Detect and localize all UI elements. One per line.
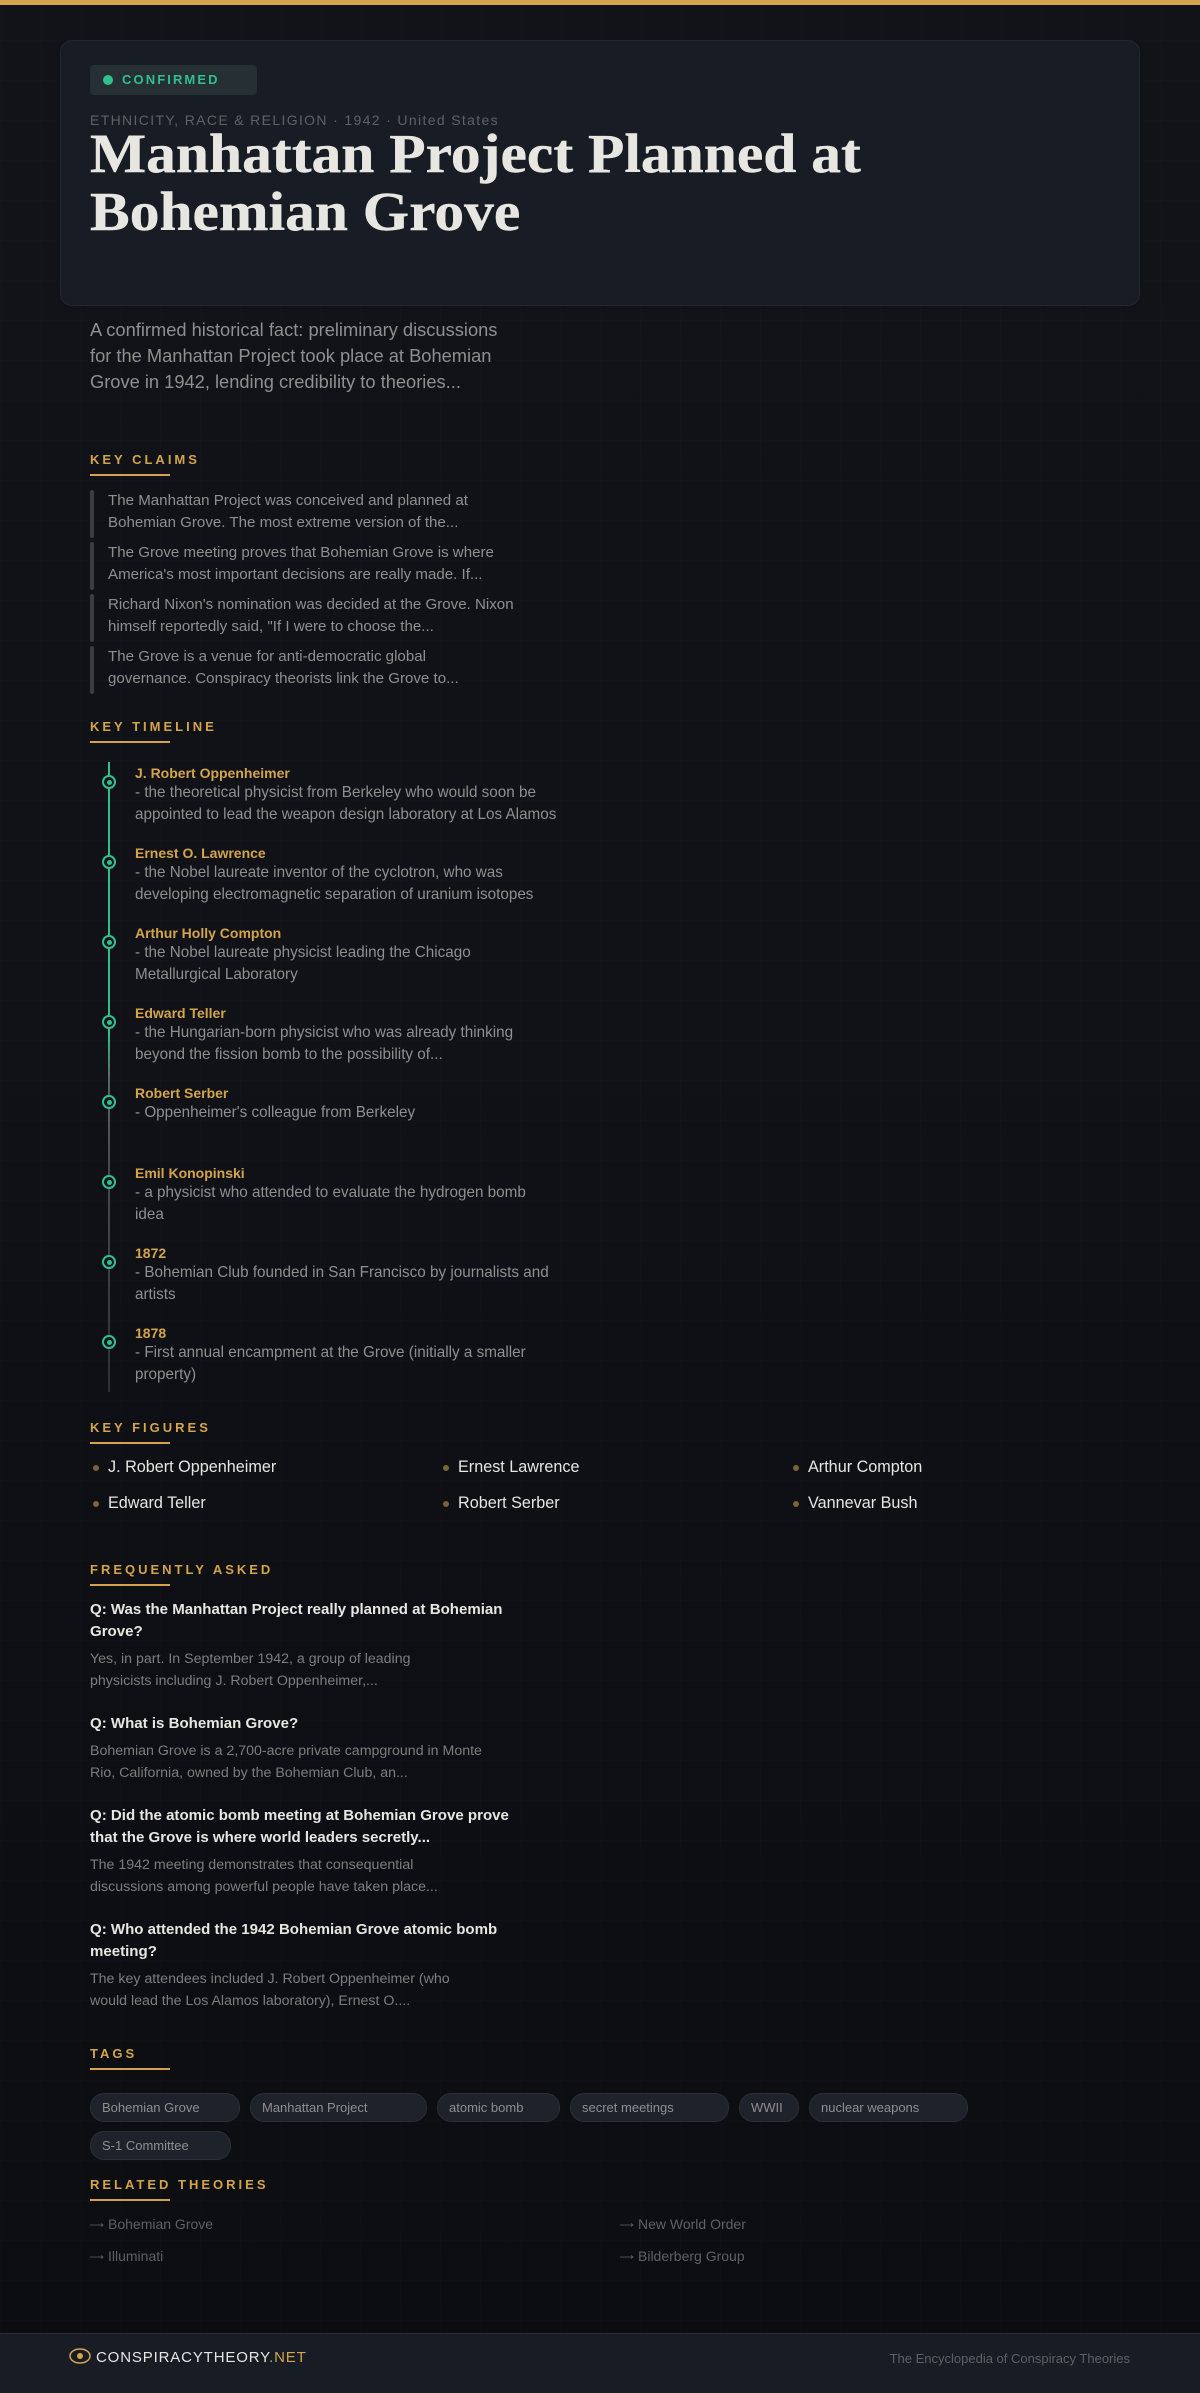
timeline spine — [108, 762, 110, 1392]
FAQ 4: The key attendees included J. Robert Oppenheimer (who — [90, 1971, 450, 1987]
event: J. Robert Oppenheimer: J. Robert Oppenheimer — [135, 765, 290, 781]
panel: hero header — [60, 40, 1140, 306]
tag — [90, 2131, 231, 2160]
event: 1878 — [102, 1325, 526, 1383]
event: Ernest O. Lawrence: Ernest O. Lawrence — [135, 845, 266, 861]
claim 4: The Grove is a venue for anti-democratic global — [108, 648, 426, 665]
heading: key figures: KEY FIGURES — [90, 1420, 211, 1435]
figures grid — [93, 1458, 922, 1512]
title — [90, 123, 861, 242]
summary text: for the Manhattan Project took place at Bohemian — [90, 345, 491, 366]
tag — [437, 2093, 560, 2122]
figure: Ernest Lawrence: Ernest Lawrence — [458, 1458, 579, 1476]
event: Robert Serber — [102, 1085, 415, 1121]
title: Manhattan Project Planned at — [90, 123, 861, 184]
FAQ 3: that the Grove is where world leaders secretly... — [90, 1829, 430, 1846]
claim 3: himself reportedly said, "If I were to choose the... — [108, 618, 434, 635]
summary text: Grove in 1942, lending credibility to theories... — [90, 371, 461, 392]
event: 1872: artists — [135, 1286, 176, 1303]
FAQ 3: discussions among powerful people have taken place... — [90, 1879, 438, 1895]
footer tagline: The Encyclopedia of Conspiracy Theories — [890, 2351, 1130, 2366]
related link: Bohemian Grove — [108, 2216, 213, 2232]
claim 3: Richard Nixon's nomination was decided at the Grove. Nixon — [108, 596, 514, 613]
figure: Vannevar Bush: Vannevar Bush — [808, 1494, 918, 1512]
event: Emil Konopinski — [102, 1165, 526, 1223]
related theories — [90, 2216, 746, 2264]
FAQ 4: would lead the Los Alamos laboratory), Ernest O.... — [90, 1993, 410, 2009]
timeline — [102, 762, 556, 1392]
FAQ 1: Yes, in part. In September 1942, a group of leading — [90, 1651, 410, 1667]
FAQ 2 — [90, 1715, 482, 1781]
tag: S-1 Committee — [102, 2138, 189, 2153]
figure: J. Robert Oppenheimer: J. Robert Oppenheimer — [108, 1458, 276, 1476]
event: Robert Serber: - Oppenheimer's colleague from Berkeley — [135, 1104, 415, 1121]
event: Ernest O. Lawrence: - the Nobel laureate inventor of the cyclotron, who was — [135, 864, 503, 881]
claim 1 — [90, 490, 468, 538]
tag — [739, 2093, 799, 2122]
icon: eye logo — [69, 2348, 91, 2364]
FAQ 2: Rio, California, owned by the Bohemian Club, an... — [90, 1765, 408, 1781]
FAQ 1: Q: Was the Manhattan Project really planned at Bohemian — [90, 1601, 502, 1618]
FAQ 2: Q: What is Bohemian Grove? — [90, 1715, 298, 1732]
related link: Illuminati — [108, 2248, 163, 2264]
claim 2 — [90, 542, 494, 590]
claim 1: The Manhattan Project was conceived and planned at — [108, 492, 468, 509]
tag: WWII — [751, 2100, 783, 2115]
event: Edward Teller: Edward Teller — [135, 1005, 226, 1021]
footer — [0, 2333, 1200, 2393]
event: 1878: - First annual encampment at the Grove (initially a smaller — [135, 1344, 526, 1361]
tags — [90, 2093, 968, 2160]
heading: tags: TAGS — [90, 2046, 137, 2061]
event: Robert Serber: Robert Serber — [135, 1085, 228, 1101]
logo wordmark: CONSPIRACYTHEORY.NET — [96, 2349, 307, 2366]
event: 1872 — [102, 1245, 549, 1303]
event: 1878: 1878 — [135, 1325, 166, 1341]
FAQ 3: The 1942 meeting demonstrates that consequential — [90, 1857, 413, 1873]
tag — [809, 2093, 968, 2122]
event: Edward Teller: - the Hungarian-born physicist who was already thinking — [135, 1024, 513, 1041]
tag — [90, 2093, 240, 2122]
event: Ernest O. Lawrence — [102, 845, 533, 903]
heading: key claims: KEY CLAIMS — [90, 452, 200, 467]
event: Emil Konopinski: - a physicist who attended to evaluate the hydrogen bomb — [135, 1184, 526, 1201]
related link: Bilderberg Group — [638, 2248, 745, 2264]
tag: secret meetings — [582, 2100, 674, 2115]
claim 4 — [90, 646, 459, 694]
figure: Arthur Compton: Arthur Compton — [808, 1458, 922, 1476]
claims list — [90, 490, 514, 694]
figure: Robert Serber: Robert Serber — [458, 1494, 560, 1512]
related link: New World Order — [638, 2216, 746, 2232]
event: J. Robert Oppenheimer: - the theoretical physicist from Berkeley who would soon be — [135, 784, 536, 801]
claim 2: America's most important decisions are really made. If... — [108, 566, 482, 583]
event: J. Robert Oppenheimer — [102, 765, 556, 823]
claim 2: The Grove meeting proves that Bohemian Grove is where — [108, 544, 494, 561]
tag — [570, 2093, 729, 2122]
claim 3 — [90, 594, 514, 642]
tag — [250, 2093, 427, 2122]
figure: Edward Teller: Edward Teller — [108, 1494, 206, 1512]
FAQ 3 — [90, 1807, 509, 1895]
event: Edward Teller: beyond the fission bomb to the possibility of... — [135, 1046, 443, 1063]
event: Arthur Holly Compton: Arthur Holly Compton — [135, 925, 281, 941]
event: Arthur Holly Compton: Metallurgical Laboratory — [135, 966, 298, 983]
badge label: CONFIRMED — [122, 72, 220, 87]
FAQ 4: Q: Who attended the 1942 Bohemian Grove atomic bomb — [90, 1921, 497, 1938]
FAQ 1 — [90, 1601, 502, 1689]
summary text — [90, 319, 497, 392]
claim 1: Bohemian Grove. The most extreme version of the... — [108, 514, 458, 531]
event: 1878: property) — [135, 1366, 196, 1383]
event: Arthur Holly Compton — [102, 925, 471, 983]
heading: frequently asked: FREQUENTLY ASKED — [90, 1562, 273, 1577]
claim 4: governance. Conspiracy theorists link the Grove to... — [108, 670, 459, 687]
heading: related theories: RELATED THEORIES — [90, 2177, 268, 2192]
event: Edward Teller — [102, 1005, 513, 1063]
tag: nuclear weapons — [821, 2100, 919, 2115]
FAQ 2: Bohemian Grove is a 2,700-acre private campground in Monte — [90, 1743, 482, 1759]
tag: atomic bomb — [449, 2100, 523, 2115]
event: Emil Konopinski: idea — [135, 1206, 164, 1223]
top accent bar — [0, 0, 1200, 5]
summary text: A confirmed historical fact: preliminary discussions — [90, 319, 497, 340]
event: Ernest O. Lawrence: developing electromagnetic separation of uranium isotopes — [135, 886, 533, 903]
category meta line: ETHNICITY, RACE & RELIGION · 1942 · United States — [90, 112, 499, 128]
FAQ 1: physicists including J. Robert Oppenheimer,... — [90, 1673, 378, 1689]
FAQ 1: Grove? — [90, 1623, 143, 1640]
FAQ 3: Q: Did the atomic bomb meeting at Bohemian Grove prove — [90, 1807, 509, 1824]
title: Bohemian Grove — [90, 181, 520, 242]
FAQ 4 — [90, 1921, 497, 2009]
event: Arthur Holly Compton: - the Nobel laureate physicist leading the Chicago — [135, 944, 471, 961]
event: 1872: - Bohemian Club founded in San Francisco by journalists and — [135, 1264, 549, 1281]
event: J. Robert Oppenheimer: appointed to lead the weapon design laboratory at Los Alamos — [135, 806, 556, 823]
event: 1872: 1872 — [135, 1245, 166, 1261]
icon: status dot — [103, 75, 113, 85]
heading: key timeline: KEY TIMELINE — [90, 719, 217, 734]
FAQ 4: meeting? — [90, 1943, 157, 1960]
tag: Bohemian Grove — [102, 2100, 200, 2115]
event: Emil Konopinski: Emil Konopinski — [135, 1165, 245, 1181]
tag: Manhattan Project — [262, 2100, 368, 2115]
badge: confirmed — [90, 65, 257, 95]
